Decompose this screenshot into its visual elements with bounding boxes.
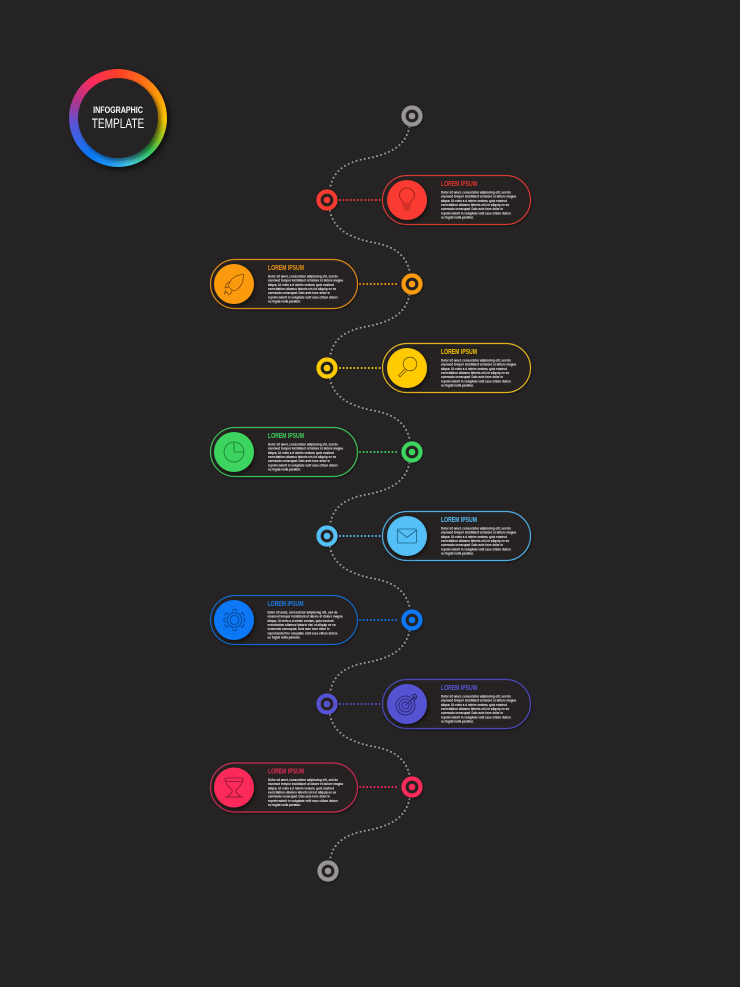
icon disc 6 — [214, 600, 254, 640]
icon disc 4 — [214, 432, 254, 472]
connector 3 — [340, 367, 381, 369]
body text 8: commodo consequat. Duis aute irure dolor in — [268, 794, 330, 799]
body text 2: commodo consequat. Duis aute irure dolor in — [268, 290, 330, 295]
body text 6: eiusmod tempor incididunt ut labore et dolore magna — [268, 614, 343, 619]
heading 5: LOREM IPSUM — [441, 515, 477, 524]
body text 6: Dolor sit amet, consectetur adipiscing elit, sed do — [268, 609, 338, 614]
body text 2: eiusmod tempor incididunt ut labore et dolore magna — [268, 278, 344, 283]
body text 4: reprehenderit in voluptate velit esse cillum dolore — [268, 462, 339, 467]
body text 2: aliqua. Ut enim a d minim veniam, quis nostrud — [268, 282, 334, 287]
connector 2 — [360, 283, 399, 285]
body text 5: Dolor sit amet, consectetur adipiscing elit, sed do — [441, 525, 511, 530]
body text 7: exercitation ullamco laboris nisi ut aliquip ex ea — [441, 706, 510, 711]
body text 1: commodo consequat. Duis aute irure dolor in — [441, 206, 503, 211]
node 1 — [318, 192, 336, 208]
end node — [320, 862, 336, 880]
card 6 — [210, 596, 358, 644]
connector 5 — [340, 535, 381, 537]
body text 2: Dolor sit amet, consectetur adipiscing elit, sed do — [268, 273, 338, 278]
title ring badge — [69, 69, 167, 167]
body text 8: aliqua. Ut enim a d minim veniam, quis nostrud — [268, 785, 334, 790]
body text 7: eiusmod tempor incididunt ut labore et dolore magna — [441, 698, 517, 703]
body text 2: reprehenderit in voluptate velit esse cillum dolore — [268, 294, 339, 299]
body text 7: reprehenderit in voluptate velit esse cillum dolore — [441, 714, 512, 719]
body text 4 — [268, 441, 344, 472]
heading 1: LOREM IPSUM — [441, 179, 477, 188]
icon: trophy cup — [225, 778, 243, 797]
body text 8 — [268, 777, 344, 807]
card 8 — [210, 763, 358, 812]
body text 5: reprehenderit in voluptate velit esse cillum dolore — [441, 546, 512, 551]
body text 6: eu fugiat nulla pariatur. — [268, 635, 300, 640]
body text 8: Dolor sit amet, consectetur adipiscing elit, sed do — [268, 777, 338, 782]
node 5 — [318, 528, 336, 544]
body text 5 — [441, 525, 517, 556]
node 4 — [404, 444, 420, 460]
card 2 — [210, 260, 358, 308]
heading 2: LOREM IPSUM — [268, 263, 304, 272]
icon: gear — [224, 610, 245, 630]
step 8: trophy (pink) — [210, 763, 420, 812]
body text 6: exercitation ullamco laboris nisi ut aliquip ex ea — [268, 622, 336, 627]
body text 5: eu fugiat nulla pariatur. — [441, 551, 474, 556]
body text 1: aliqua. Ut enim a d minim veniam, quis nostrud — [441, 198, 507, 203]
card 3 — [382, 344, 530, 392]
heading 6: LOREM IPSUM — [268, 599, 304, 608]
body text 1: reprehenderit in voluptate velit esse cillum dolore — [441, 210, 512, 215]
heading 7: LOREM IPSUM — [441, 683, 477, 692]
connector 6 — [360, 619, 399, 621]
body text 2: exercitation ullamco laboris nisi ut aliquip ex ea — [268, 286, 337, 291]
connector 7 — [340, 703, 381, 705]
node 3 — [318, 360, 336, 376]
title line 2: TEMPLATE — [92, 115, 144, 131]
icon disc 8 — [214, 768, 254, 808]
heading 8: LOREM IPSUM — [268, 766, 304, 776]
body text 8: eu fugiat nulla pariatur. — [268, 802, 301, 807]
body text 2 — [268, 273, 344, 304]
body text 8: exercitation ullamco laboris nisi ut aliquip ex ea — [268, 790, 337, 794]
body text 2: eu fugiat nulla pariatur. — [268, 299, 301, 304]
body text 3: aliqua. Ut enim a d minim veniam, quis nostrud — [441, 366, 507, 371]
body text 1: Dolor sit amet, consectetur adipiscing elit, sed do — [441, 189, 511, 194]
timeline connector path — [330, 127, 410, 860]
title line 1: INFOGRAPHIC — [93, 105, 143, 115]
body text 5: commodo consequat. Duis aute irure dolor in — [441, 542, 503, 547]
card 5 — [382, 512, 530, 560]
body text 3: Dolor sit amet, consectetur adipiscing elit, sed do — [441, 357, 511, 362]
icon disc 7 — [387, 684, 427, 724]
body text 3: reprehenderit in voluptate velit esse cillum dolore — [441, 378, 512, 383]
body text 3: eu fugiat nulla pariatur. — [441, 383, 474, 388]
icon disc 3 — [387, 348, 427, 388]
body text 1: eu fugiat nulla pariatur. — [441, 215, 474, 220]
icon disc 5 — [387, 516, 427, 556]
card 7 — [382, 680, 530, 728]
body text 7: Dolor sit amet, consectetur adipiscing elit, sed do — [441, 693, 511, 698]
body text 8: eiusmod tempor incididunt ut labore et dolore magna — [268, 781, 344, 786]
step 5: mail (light blue) — [318, 512, 530, 560]
body text 7: eu fugiat nulla pariatur. — [441, 719, 474, 724]
body text 1: eiusmod tempor incididunt ut labore et dolore magna — [441, 194, 517, 199]
body text 8: reprehenderit in voluptate velit esse cillum dolore — [268, 798, 339, 803]
step 3: search (yellow) — [318, 344, 530, 392]
step 1: idea (red) — [318, 176, 530, 224]
start node — [404, 108, 420, 124]
connector 1 — [340, 199, 381, 201]
body text 6: reprehenderit in voluptate velit esse cillum dolore — [268, 630, 338, 635]
body text 4: eiusmod tempor incididunt ut labore et dolore magna — [268, 446, 344, 451]
body text 3: eiusmod tempor incididunt ut labore et dolore magna — [441, 362, 517, 367]
connector 8 — [360, 786, 399, 788]
body text 4: Dolor sit amet, consectetur adipiscing elit, sed do — [268, 441, 338, 446]
body text 4: commodo consequat. Duis aute irure dolor in — [268, 458, 330, 463]
node 8 — [404, 778, 420, 796]
body text 4: exercitation ullamco laboris nisi ut aliquip ex ea — [268, 454, 337, 459]
body text 4: aliqua. Ut enim a d minim veniam, quis nostrud — [268, 450, 334, 455]
icon disc 2 — [214, 264, 254, 304]
icon: pie chart — [224, 442, 244, 462]
connector 4 — [360, 451, 399, 453]
body text 6: aliqua. Ut enim a d minim veniam, quis nostrud — [268, 618, 334, 623]
node 6 — [404, 612, 420, 628]
icon: magnifier — [398, 357, 417, 377]
body text 5: eiusmod tempor incididunt ut labore et dolore magna — [441, 530, 517, 535]
icon: target — [396, 694, 417, 715]
body text 7: aliqua. Ut enim a d minim veniam, quis nostrud — [441, 702, 507, 707]
icon: light bulb — [400, 188, 414, 210]
body text 5: exercitation ullamco laboris nisi ut aliquip ex ea — [441, 538, 510, 543]
body text 3: exercitation ullamco laboris nisi ut aliquip ex ea — [441, 370, 510, 375]
step 4: chart (green) — [210, 428, 420, 476]
body text 6: commodo consequat. Duis aute irure dolor in — [268, 626, 330, 631]
body text 7: commodo consequat. Duis aute irure dolor in — [441, 710, 503, 715]
body text 4: eu fugiat nulla pariatur. — [268, 467, 301, 472]
card 4 — [210, 428, 358, 476]
icon disc 1 — [387, 180, 427, 220]
body text 6 — [268, 609, 343, 640]
card 1 — [382, 176, 530, 224]
body text 7 — [441, 693, 517, 724]
icon: rocket — [224, 274, 244, 295]
heading 3: LOREM IPSUM — [441, 347, 477, 356]
icon: envelope — [398, 529, 416, 543]
body text 5: aliqua. Ut enim a d minim veniam, quis nostrud — [441, 534, 507, 539]
heading 4: LOREM IPSUM — [268, 431, 304, 440]
step 7: target (purple) — [318, 680, 530, 728]
body text 1 — [441, 189, 517, 220]
step 6: settings (blue) — [210, 596, 420, 644]
body text 3: commodo consequat. Duis aute irure dolor in — [441, 374, 503, 379]
node 2 — [404, 276, 420, 292]
node 7 — [318, 696, 336, 712]
body text 3 — [441, 357, 517, 388]
body text 1: exercitation ullamco laboris nisi ut aliquip ex ea — [441, 202, 510, 207]
step 2: launch (orange) — [210, 260, 420, 308]
